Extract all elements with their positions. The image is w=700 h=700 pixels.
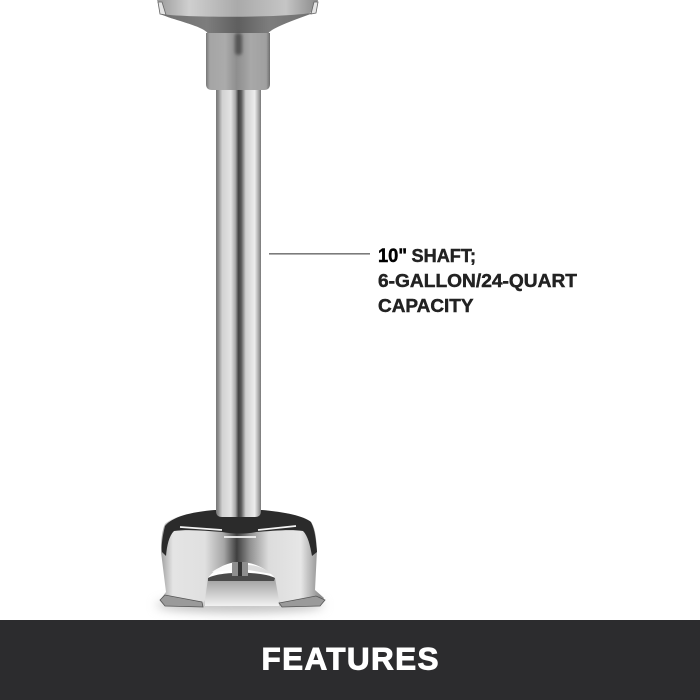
callout text: 6-GALLON/24-QUART: [378, 270, 578, 291]
steel shaft: [216, 90, 261, 518]
callout leader line: [269, 253, 370, 255]
footer heading: FEATURES: [262, 640, 438, 676]
motor collar bowl: [157, 0, 318, 35]
callout text: CAPACITY: [378, 295, 474, 316]
callout text: [378, 245, 578, 316]
blade guard: [156, 510, 325, 613]
callout text: SHAFT;: [412, 245, 476, 266]
callout text: 10": [378, 245, 407, 267]
footer band: [0, 620, 700, 700]
product: immersion blender shaft: [156, 0, 325, 613]
shaft base ferrule: [216, 505, 261, 517]
collar neck: [206, 33, 270, 90]
